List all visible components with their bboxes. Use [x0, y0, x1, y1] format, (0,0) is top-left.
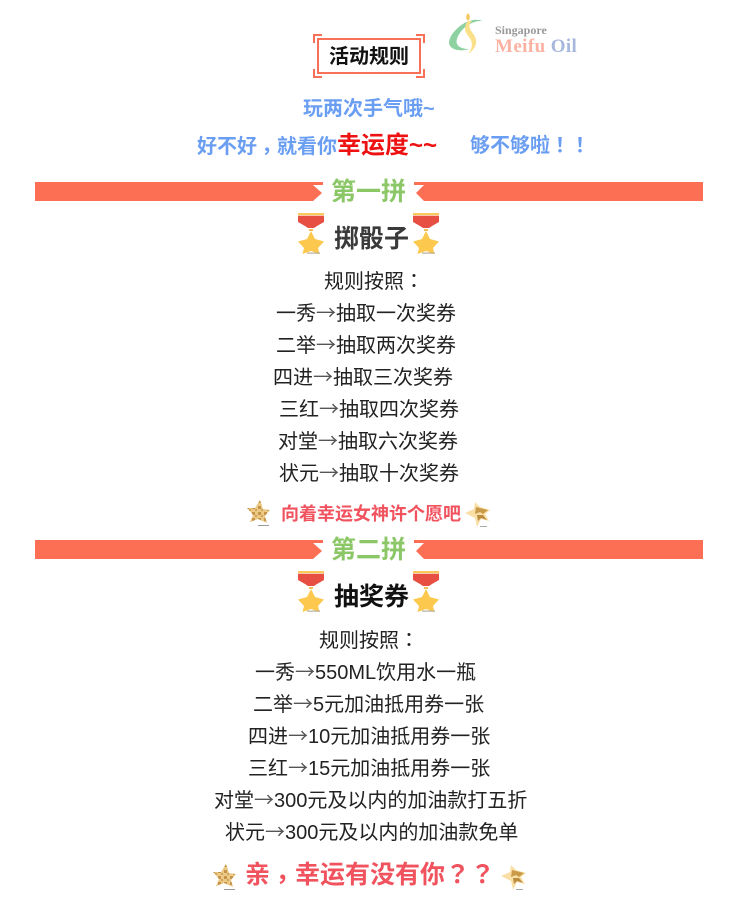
heading text: 掷骰子: [334, 225, 409, 253]
intro line 2: 好不好，就看你幸运度~~: [197, 132, 437, 164]
intro line 1: 玩两次手气哦~: [303, 98, 435, 120]
rules list: prizes: [214, 624, 527, 845]
icon: medal left: [298, 213, 324, 254]
rule 5: 对堂→抽取六次奖券: [278, 425, 458, 454]
rule 3: 四进→抽取三次奖券: [273, 361, 453, 390]
section heading: 抽奖券: [298, 571, 439, 612]
icon: medal left: [298, 571, 324, 612]
prize 1: 一秀→550ML饮用水一瓶: [255, 656, 476, 685]
rules list: dice: [273, 265, 459, 486]
banner: 第二拼: [35, 536, 703, 564]
banner ribbon: [35, 182, 703, 201]
heading text: 抽奖券: [334, 583, 409, 611]
logo text: Singapore: Singapore: [495, 23, 547, 37]
prize 5: 对堂→300元及以内的加油款打五折: [214, 784, 527, 813]
icon: gold star right: [465, 502, 490, 527]
banner ribbon: [35, 540, 703, 559]
rule 4: 三红→抽取四次奖券: [279, 393, 459, 422]
icon: medal right: [413, 571, 439, 612]
logo text: Meifu Oil: Meifu Oil: [495, 36, 577, 57]
closing line: [213, 855, 526, 896]
title box: 活动规则: [313, 34, 425, 78]
wish text: 向着幸运女神许个愿吧: [281, 504, 461, 524]
logo: Singapore Meifu Oil: [449, 14, 577, 57]
prize 2: 二举→5元加油抵用券一张: [253, 688, 484, 717]
icon: logo swirl: [449, 14, 483, 54]
rule heading: 规则按照：: [319, 624, 419, 653]
icon: gold star left: [247, 500, 270, 526]
wish line: [247, 500, 490, 527]
banner heading: 第二拼: [331, 536, 406, 564]
prize 4: 三红→15元加油抵用券一张: [248, 752, 490, 781]
banner heading: 第一拼: [331, 178, 406, 206]
rule heading: 规则按照：: [324, 265, 424, 294]
icon: gold star right: [501, 865, 526, 890]
section heading: 掷骰子: [298, 213, 439, 254]
title text: 活动规则: [329, 46, 409, 68]
icon: medal right: [413, 213, 439, 254]
rule 2: 二举→抽取两次奖券: [276, 329, 456, 358]
icon: gold star left: [213, 864, 236, 890]
closing text: 亲，幸运有没有你？？: [245, 855, 495, 896]
title frame: [313, 34, 425, 78]
rule 1: 一秀→抽取一次奖券: [276, 297, 456, 326]
prize 6: 状元→300元及以内的加油款免单: [225, 816, 518, 845]
rule 6: 状元→抽取十次奖券: [279, 457, 459, 486]
intro line 2 right: 够不够啦！！: [470, 129, 590, 158]
prize 3: 四进→10元加油抵用券一张: [248, 720, 490, 749]
banner: 第一拼: [35, 178, 703, 206]
